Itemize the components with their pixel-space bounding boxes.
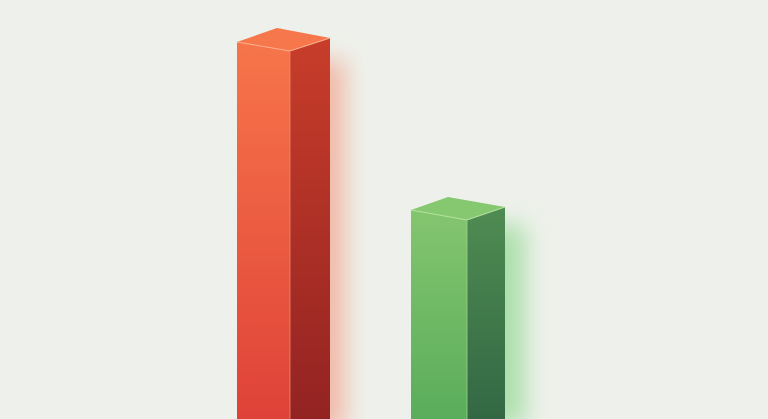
glow: red bar	[300, 60, 345, 419]
bar: red	[237, 28, 330, 419]
bar: green	[411, 197, 505, 419]
glow: green bar	[475, 225, 525, 419]
